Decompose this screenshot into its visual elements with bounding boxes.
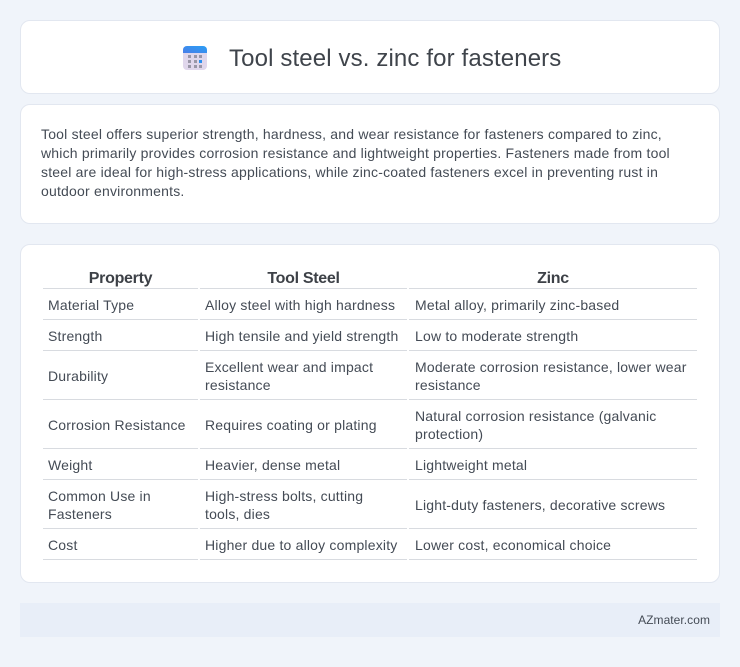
row: strength: High tensile and yield strength <box>205 328 398 344</box>
description text: outdoor environments. <box>41 183 185 199</box>
description text <box>41 126 670 199</box>
row: common use in fasteners: Light-duty fasteners, decorative screws <box>415 497 665 513</box>
row: material type <box>48 297 619 313</box>
row: weight: Lightweight metal <box>415 457 527 473</box>
comparison table <box>43 270 697 560</box>
row: strength <box>48 328 578 344</box>
row: cost: Lower cost, economical choice <box>415 537 611 553</box>
row: durability <box>48 359 687 393</box>
row: material type: Metal alloy, primarily zinc-based <box>415 297 619 313</box>
panel: comparison table card <box>20 244 720 583</box>
description text: steel are ideal for high-stress applications, while zinc-coated fasteners excel in preventing rust in <box>41 164 658 180</box>
table header: Tool Steel <box>267 270 340 287</box>
row: cost <box>48 537 611 553</box>
row: material type: Alloy steel with high hardness <box>205 297 395 313</box>
row: common use in fasteners: High-stress bolts, cutting <box>205 488 363 504</box>
footer bar <box>20 603 720 637</box>
row: corrosion resistance: Natural corrosion resistance (galvanic <box>415 408 656 424</box>
row: material type: Material Type <box>48 297 134 313</box>
row: corrosion resistance: protection) <box>415 426 483 442</box>
row: common use in fasteners: Fasteners <box>48 506 112 522</box>
row: durability: resistance <box>415 377 481 393</box>
row: cost: Cost <box>48 537 78 553</box>
row: weight: Heavier, dense metal <box>205 457 340 473</box>
row: strength: Low to moderate strength <box>415 328 578 344</box>
panel: description card <box>20 104 720 224</box>
row: strength: Strength <box>48 328 102 344</box>
row: corrosion resistance <box>48 408 656 442</box>
row: durability: resistance <box>205 377 271 393</box>
footer text: AZmater.com <box>638 613 710 627</box>
row: durability: Durability <box>48 368 108 384</box>
panel: title card <box>20 20 720 94</box>
table header: Property <box>89 270 152 287</box>
row: durability: Excellent wear and impact <box>205 359 373 375</box>
row: common use in fasteners <box>48 488 665 522</box>
row: weight: Weight <box>48 457 92 473</box>
row: common use in fasteners: Common Use in <box>48 488 151 504</box>
description text: Tool steel offers superior strength, hardness, and wear resistance for fasteners compared to zinc, <box>41 126 662 142</box>
row: weight <box>48 457 527 473</box>
row: corrosion resistance: Corrosion Resistance <box>48 417 186 433</box>
icon: calendar <box>183 46 207 70</box>
row: cost: Higher due to alloy complexity <box>205 537 397 553</box>
title: Tool steel vs. zinc for fasteners <box>229 45 561 72</box>
row: durability: Moderate corrosion resistance, lower wear <box>415 359 687 375</box>
table header <box>89 270 569 287</box>
description text: which primarily provides corrosion resistance and lightweight properties. Fasteners made from tool <box>41 145 670 161</box>
row: corrosion resistance: Requires coating or plating <box>205 417 377 433</box>
table header: Zinc <box>537 270 569 287</box>
row: common use in fasteners: tools, dies <box>205 506 270 522</box>
